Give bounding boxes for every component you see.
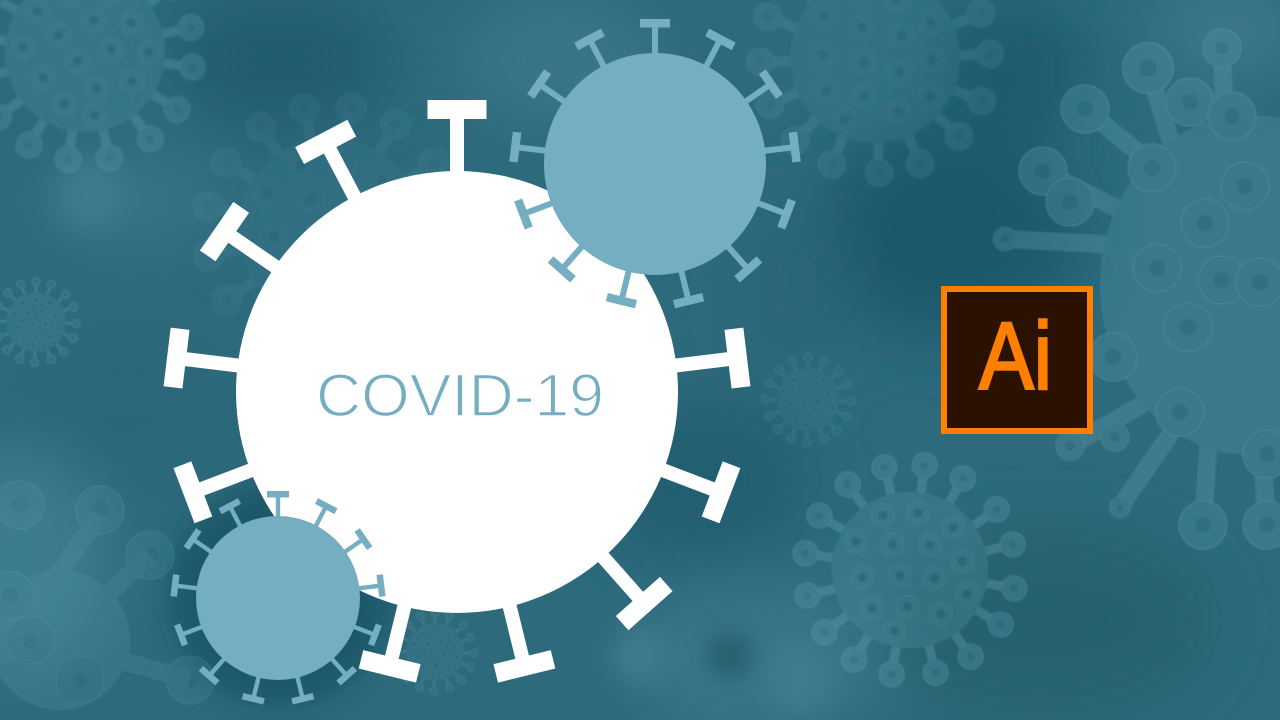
large blue virus xyxy=(509,19,801,308)
background virus: large bottom left xyxy=(0,481,214,710)
main virus body xyxy=(236,171,678,613)
background virus: top centre xyxy=(710,0,1040,224)
background virus: small bottom centre xyxy=(392,609,478,695)
background virus: behind main circle top xyxy=(169,69,492,392)
background virus: small faint right of main xyxy=(761,353,856,448)
icon: Adobe Illustrator logo xyxy=(941,286,1093,434)
background virus: small left xyxy=(0,277,81,367)
title: COVID-19: COVID-19 xyxy=(316,362,604,429)
background virus: bottom right centre xyxy=(776,436,1044,704)
icon: Adobe Illustrator logo: Ai xyxy=(979,303,1052,410)
main virus spikes xyxy=(164,100,750,683)
background virus: large right xyxy=(993,29,1280,549)
small blue virus xyxy=(170,491,386,705)
background virus: top left xyxy=(0,0,234,201)
main white virus with spikes xyxy=(164,100,750,683)
